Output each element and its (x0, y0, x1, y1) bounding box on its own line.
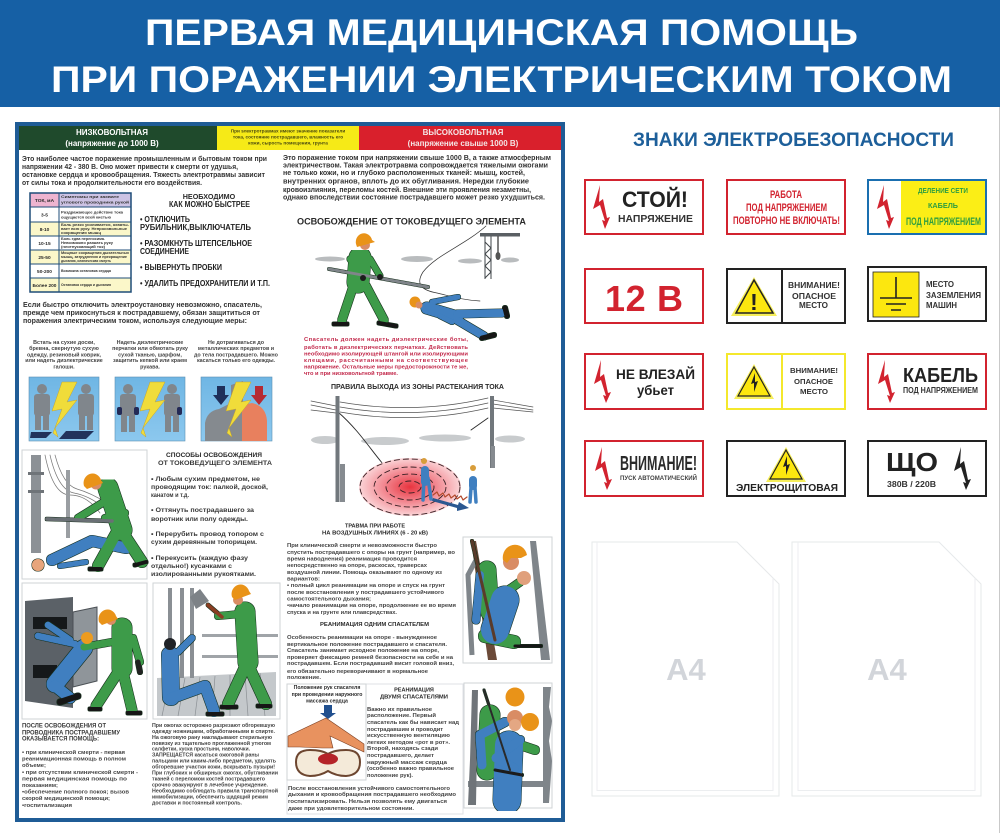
text: two rescuers: легких методом «рот в рот». (367, 740, 451, 746)
text: two rescuers: (особенно важно правильное (367, 765, 454, 772)
page right edge line (999, 107, 1000, 833)
illustration: rescuer with insulating pole (315, 226, 520, 338)
list: urgent actions: СОЕДИНЕНИЕ (140, 247, 189, 256)
text: clinical death on a pole: спуска и на грунте или плавсредствах. (287, 610, 398, 616)
text: burns (152, 722, 278, 806)
sign: stop voltage (585, 180, 703, 234)
table: current and symptoms: (неотпускающий ток) (61, 245, 105, 249)
text: after release: •обеспечение полного покоя; вызов (22, 788, 130, 796)
panel: first aid poster (17, 124, 563, 820)
table: current and symptoms: вает всю руку. Непроизвольные (61, 227, 127, 231)
text: measure 2: Надеть диэлектрические (117, 340, 183, 346)
text: after release: • при отсутствии клинической смерти - (22, 769, 138, 776)
text: after recovery: госпитализировать. Нельзя позволять ему двигаться (288, 799, 447, 805)
table: current and symptoms: Возможна остановка сердца (61, 269, 111, 273)
table: current and symptoms: сокращения мышц (61, 231, 102, 235)
sign: cable under voltage, network division: ДЕЛЕНИЕ СЕТИ (918, 186, 968, 195)
sign: yellow caution voltage (727, 354, 845, 409)
diagram: heart massage hand position: при проведении наружного (292, 692, 362, 698)
sign: yellow caution voltage: МЕСТО (800, 387, 828, 396)
text: measure 2: перчатки или обмотать руку (112, 345, 188, 352)
sign: work under voltage (727, 180, 845, 234)
header: note (217, 126, 359, 150)
icon: dielectric gloves (115, 377, 185, 441)
text: after release: • при клинической смерти - первая (22, 749, 125, 756)
sign: distribution board 380/220 V (868, 441, 986, 496)
text: one rescuer: Спасатель занимает исходное положение на опоре, (287, 648, 440, 654)
text: burns: На ожоговую рану накладывают стерильную (152, 735, 272, 741)
text: clinical death on a pole: после восстановления у пострадавшего устойчивого (287, 589, 445, 596)
list: methods of release: канатом и т.д. (151, 492, 189, 499)
diagram: heart massage hand position: массажа сердца (306, 698, 348, 704)
heading: overhead lines injury: НА ВОЗДУШНЫХ ЛИНИЯХ (6 - 20 кВ) (322, 530, 428, 536)
illustration: one rescuer on pole (463, 537, 552, 663)
text: low voltage intro: от силы тока и продолжительности его воздействия. (22, 178, 202, 187)
sign: yellow caution voltage: ВНИМАНИЕ! (790, 366, 838, 375)
text: measure 1: Встать на сухие доски, (33, 340, 95, 346)
text: high voltage intro: однако впоследствии состояние пострадавшего может резко ухудшиться. (283, 192, 545, 202)
text: measure 1 (25, 340, 103, 370)
sign: machine grounding point: МЕСТО (926, 280, 954, 289)
text: after release (22, 722, 138, 809)
heading: step voltage rules: ПРАВИЛА ВЫХОДА ИЗ ЗОНЫ РАСТЕКАНИЯ ТОКА (331, 382, 505, 391)
text: burns: иммобилизации, обеспечить щадящий режим (152, 794, 268, 800)
table: current and symptoms: 3-5 (41, 212, 48, 218)
table: current and symptoms: дыхания, клиническая смерть (61, 259, 111, 263)
text: after release: скорой медицинской помощи; (22, 795, 110, 802)
text: burns: При ожогах осторожно разрезают обгоревшую (152, 722, 275, 729)
text: low voltage intro: остановке сердца и кровообращения. Тяжесть электротравмы зависит (22, 170, 265, 179)
text: low voltage intro (22, 154, 267, 187)
list: methods of release: проводящим ток: палкой, доской, (151, 483, 268, 491)
pocket: A4 holder right: А4 (867, 652, 908, 687)
sign: machine grounding point (868, 267, 986, 321)
sign: stop voltage: СТОЙ! (622, 187, 688, 212)
text: low voltage intro: напряжении 42 - 380 В. Оно может привести к смерти от удушья, (22, 162, 238, 171)
text: after release: показаниям; (22, 783, 58, 789)
text: measure 3: до тела пострадавшего. Можно (194, 352, 279, 358)
text: burns: тканей с переломом костей пострадавшего (152, 776, 266, 782)
list: methods of release: СПОСОБЫ ОСВОБОЖДЕНИЯ (166, 452, 262, 459)
illustration: victim at electrical cabinet (22, 583, 147, 719)
header: note: кожи, сырость помещения, грунта (248, 140, 328, 146)
sign: switchboard room (727, 441, 845, 496)
text: measure 3 (194, 340, 279, 364)
text: two rescuers: наружный массаж сердца (367, 759, 448, 766)
text: two rescuers: расположение. Первый (367, 712, 436, 719)
sign: caution dangerous place: ОПАСНОЕ (792, 292, 837, 301)
table: current and symptoms: 10-15 (38, 241, 51, 247)
text: warning in red: напряжение. Остальные меры предосторожности те же, (304, 364, 468, 370)
list: methods of release: • Оттянуть пострадавшего за (151, 507, 254, 514)
sign: caution dangerous place (727, 269, 845, 323)
text: after release: реанимационная помощь в полном (22, 756, 126, 762)
text: burns: пальцами или каким-либо предметом, удалять (152, 758, 277, 764)
text: warning in red: клещами, рассчитанными на соответствующее (304, 358, 469, 364)
list: urgent actions (140, 192, 270, 288)
table: current and symptoms: 25-50 (38, 255, 51, 261)
sign: do not climb (585, 354, 703, 409)
table: current and symptoms: мышц, затруднения и прекращение (61, 255, 127, 259)
text: measure 2: рукава. (140, 364, 160, 370)
text: low voltage intro: Это наиболее частое поражение промышленным и бытовым током при (22, 154, 267, 163)
list: methods of release: • Перерубить провод топором с (151, 530, 264, 538)
sign: yellow caution voltage: ОПАСНОЕ (794, 377, 833, 386)
text: after recovery: даже при удовлетворительном состоянии. (288, 806, 415, 812)
text: high voltage intro: не только кожи, но и глубоко расположенных тканей: мышц, костей, (283, 168, 525, 177)
text: two rescuers: положение рук). (367, 773, 414, 779)
text: burns: повязку из тщательно проглаженной утюгом (152, 740, 271, 747)
pocket: A4 holder left (592, 542, 779, 796)
text: after release: ПОСЛЕ ОСВОБОЖДЕНИЯ ОТ (22, 722, 106, 730)
text: measure 1: или надеть диэлектрические (25, 358, 103, 364)
illustration: cutting wire with axe (153, 583, 280, 719)
text: after release: объеме; (22, 762, 46, 769)
title banner (0, 0, 1000, 107)
text: burns: При глубоких и обширных ожогах, обугливании (152, 770, 278, 776)
heading: overhead lines injury: ТРАВМА ПРИ РАБОТЕ (345, 524, 405, 530)
list: methods of release: сухим деревянным топорищем. (151, 539, 257, 546)
sign: machine grounding point: ЗАЗЕМЛЕНИЯ (926, 291, 981, 300)
text: measure 3: Не дотрагиваться до (208, 340, 265, 346)
illustration: two rescuers on pole (464, 683, 552, 808)
header: low voltage (19, 126, 217, 150)
sign: distribution board 380/220 V: 380В / 220В (887, 480, 936, 489)
sign: attention automatic start: ВНИМАНИЕ! (620, 453, 697, 475)
list: methods of release: воротник или полу одежды. (151, 516, 248, 523)
header: high voltage (359, 126, 561, 150)
sign: attention automatic start: ПУСК АВТОМАТИЧЕСКИЙ (620, 473, 697, 482)
text: protective measures: Если быстро отключить электроустановку невозможно, спасатель, (23, 300, 262, 309)
sign: cable under voltage (868, 354, 986, 409)
text: high voltage intro: Это поражение током при напряжении свыше 1000 В, а также атмосферным (283, 153, 551, 162)
table: current and symptoms: Мощные сокращения дыхательных (61, 251, 129, 255)
text: clinical death on a pole: воздушной линии. Помощь оказывают по одному из (287, 569, 442, 576)
text: clinical death on a pole: вариантов: (287, 576, 320, 582)
table: current and symptoms (30, 193, 131, 292)
text: after release: первая медицинская помощь по (22, 776, 128, 782)
text: one rescuer: его обязательно переворачивают в нормальное (287, 668, 428, 675)
text: after release: ПРОВОДНИКА ПОСТРАДАВШЕМУ (22, 730, 121, 736)
text: burns: одежду ножницами, обработанными в спирте. (152, 728, 275, 735)
sign: 12 V (585, 269, 703, 323)
table: current and symptoms: углового проводника рукой (61, 200, 129, 204)
diagram: heart massage hand position (287, 684, 366, 780)
list: methods of release: отдельно!) кусачками с (151, 563, 232, 570)
sign: attention automatic start (585, 441, 703, 496)
list: urgent actions: КАК МОЖНО БЫСТРЕЕ (169, 200, 250, 209)
text: clinical death on a pole: время наводнения) реанимация проводится (287, 556, 417, 562)
text: one rescuer: вертикальное положение пострадавшего и спасателя. (287, 642, 448, 648)
illustration: pulling victim with a bar (22, 450, 147, 579)
text: two rescuers: Второй, находясь сзади (367, 745, 438, 752)
table: current and symptoms: Остановка сердца и дыхания (61, 283, 111, 287)
table: current and symptoms: Боль резко усиливается, охваты- (61, 223, 129, 227)
text: burns: салфетки, куска простыни, наволочки. (152, 746, 250, 752)
text: measure 2: защитить кепкой или краем (113, 357, 187, 364)
table: current and symptoms: 8-10 (40, 227, 50, 233)
text: after recovery: После восстановления устойчивого самостоятельного (288, 785, 451, 792)
text: after release: •госпитализация (22, 803, 72, 809)
heading: two rescuers (380, 688, 448, 700)
text: warning in red (304, 336, 469, 377)
text: one rescuer: пострадавшем. Если пострадавший висит головой вниз, (287, 660, 455, 667)
text: warning in red: Спасатель должен надеть диэлектрические боты, (304, 336, 468, 343)
sign: distribution board 380/220 V: ЩО (886, 447, 938, 477)
table: current and symptoms: Невозможно разжать руку (61, 241, 113, 245)
list: urgent actions: • УДАЛИТЬ ПРЕДОХРАНИТЕЛИ И Т.П. (140, 279, 270, 288)
text: one rescuer: проверяет фиксацию ремней безопасности на себе и на (287, 654, 454, 661)
table: current and symptoms: Более 200 (33, 283, 57, 289)
text: one rescuer: положение. (287, 675, 322, 681)
text: after recovery (288, 785, 457, 812)
sign: stop voltage: НАПРЯЖЕНИЕ (618, 213, 693, 225)
text: protective measures: прежде чем прикоснуться к пострадавшему, обязан защититься от (23, 308, 260, 317)
table: current and symptoms: Боль едва переносима. (61, 237, 105, 241)
text: high voltage intro: внутренних органов, вплоть до их обугливания. Нередки глубокие (283, 176, 529, 186)
pocket: A4 holder left: А4 (666, 652, 707, 687)
illustration: step voltage zone (311, 396, 533, 516)
pocket: A4 holder right (792, 542, 981, 796)
header: note: При электротравмах имеют значение показатели (231, 128, 345, 134)
diagram: heart massage hand position: Положение рук спасателя (294, 685, 360, 691)
text: measure 1: одежду, резиновый коврик, (27, 352, 102, 358)
table: current and symptoms: ощущается всей кистью (61, 216, 111, 220)
sign: cable under voltage: КАБЕЛЬ (903, 365, 978, 387)
text: clinical death on a pole: самостоятельного дыхания; (287, 596, 371, 602)
list: methods of release: • Любым сухим предметом, не (151, 475, 260, 483)
text: clinical death on a pole: При клинической смерти и невозможности быстро (287, 542, 438, 549)
list: urgent actions: НЕОБХОДИМО (183, 192, 236, 201)
text: one rescuer (287, 634, 455, 681)
header: low voltage: (напряжение до 1000 В) (65, 139, 159, 148)
text: burns: ЗАПРЕЩАЕТСЯ касаться ожоговой раны (152, 752, 259, 758)
sign: caution dangerous place: ! (750, 289, 758, 315)
list: urgent actions: • ВЫВЕРНУТЬ ПРОБКИ (140, 263, 222, 272)
sign: machine grounding point: МАШИН (926, 301, 957, 310)
text: after release: ОКАЗЫВАЕТСЯ ПОМОЩЬ: (22, 736, 99, 742)
panel: two rescuers (287, 684, 463, 814)
text: high voltage intro (283, 153, 551, 202)
heading: overhead lines injury (322, 524, 428, 536)
text: clinical death on a pole (287, 542, 456, 616)
sign: cable under voltage, network division (868, 180, 986, 234)
heading: release from live element: ОСВОБОЖДЕНИЕ ОТ ТОКОВЕДУЩЕГО ЭЛЕМЕНТА (297, 216, 526, 228)
text: protective measures (23, 300, 262, 325)
text: burns: срочно эвакуируют в лечебное учреждение. (152, 782, 268, 788)
list: urgent actions: • РАЗОМКНУТЬ ШТЕПСЕЛЬНОЕ (140, 239, 252, 248)
sign: do not climb: НЕ ВЛЕЗАЙ (616, 365, 695, 382)
text: clinical death on a pole: непосредственно на опоре, раскосах, траверсах (287, 563, 427, 569)
text: burns: Необходимо соблюдать правила транспортной (152, 788, 278, 794)
text: two rescuers: пострадавшим и проводит (367, 727, 443, 733)
text: two rescuers: спасатель как бы нависает над (367, 719, 460, 726)
list: urgent actions: РУБИЛЬНИК,ВЫКЛЮЧАТЕЛЬ (140, 223, 251, 232)
sign: cable under voltage, network division: КАБЕЛЬ (928, 201, 959, 210)
list: methods of release: • Перекусить (каждую фазу (151, 555, 248, 562)
list: methods of release (151, 452, 272, 578)
table: current and symptoms: Раздражающее действие тока (61, 210, 123, 214)
text: warning in red: что и при низковольтной травме. (304, 370, 398, 377)
title banner: ПРИ ПОРАЖЕНИИ ЭЛЕКТРИЧЕСКИМ ТОКОМ (51, 58, 952, 100)
heading: two rescuers: РЕАНИМАЦИЯ (394, 688, 434, 694)
sign: 12 V: 12 В (605, 278, 683, 319)
text: two rescuers: Важно их правильное (367, 707, 432, 713)
text: one rescuer: Особенность реанимации на опоре - вынужденное (287, 634, 437, 641)
text: measure 3: касаться только его одежды. (197, 358, 276, 364)
sign: work under voltage: ПОД НАПРЯЖЕНИЕМ (746, 202, 827, 214)
text: measure 2: сухой тканью, шарфом, (118, 352, 182, 358)
header: low voltage: НИЗКОВОЛЬТНАЯ (76, 128, 148, 137)
text: two rescuers (367, 707, 460, 779)
sign: work under voltage: ПОВТОРНО НЕ ВКЛЮЧАТЬ! (733, 215, 840, 227)
table: current and symptoms: 50-200 (37, 269, 52, 275)
text: measure 1: галоши. (53, 364, 75, 370)
icon: dielectric mats (29, 377, 99, 441)
sign: do not climb: убьет (637, 382, 674, 398)
heading: electrical safety signs: ЗНАКИ ЭЛЕКТРОБЕЗОПАСНОСТИ (633, 130, 954, 151)
text: warning in red: необходимо изолирующей штангой или изолирующими (304, 350, 468, 358)
list: methods of release: изолированными рукоятками. (151, 571, 256, 578)
text: clinical death on a pole: • полный цикл реанимации на опоре и спуск на грунт (287, 582, 445, 589)
table: current and symptoms: ТОК, мА (35, 198, 55, 204)
sign: work under voltage: РАБОТА (770, 189, 802, 201)
heading: two rescuers: ДВУМЯ СПАСАТЕЛЯМИ (380, 694, 448, 700)
header: high voltage: ВЫСОКОВОЛЬТНАЯ (423, 128, 504, 137)
text: two rescuers: пострадавшего, делает (367, 753, 434, 759)
sign: cable under voltage: ПОД НАПРЯЖЕНИЕМ (903, 386, 978, 395)
text: two rescuers: искусственную вентиляцию (367, 733, 450, 739)
text: burns: обгоревшие участки кожи, вскрывать пузыри! (152, 764, 275, 770)
icon: touching clothes only (201, 377, 272, 441)
sign: caution dangerous place: ВНИМАНИЕ! (788, 281, 840, 290)
header: high voltage: (напряжение свыше 1000 В) (408, 139, 519, 148)
text: after recovery: дыхания и кровообращения пострадавшего необходимо (288, 791, 457, 798)
text: clinical death on a pole: спустить пострадавшего с опоры на грунт (например, во (287, 550, 456, 556)
text: clinical death on a pole: •начало реанимации на опоре, продолжение ее во время (287, 603, 456, 609)
text: protective measures: поражения электрическим током, используя следующие меры: (23, 316, 247, 325)
header: note: тока, состояние пострадавшего, влажность его (233, 134, 343, 140)
text: high voltage intro: электричеством. Такая электротравма сопровождается тяжелыми ожогами (283, 160, 548, 170)
text: measure 3: металлических предметов и (198, 346, 274, 352)
sign: switchboard room: ЭЛЕКТРОЩИТОВАЯ (736, 482, 838, 494)
sign: caution dangerous place: МЕСТО (799, 301, 828, 310)
table: current and symptoms: Симптомы при захвате (61, 195, 119, 199)
title banner: ПЕРВАЯ МЕДИЦИНСКАЯ ПОМОЩЬ (145, 11, 858, 53)
text: warning in red: работать в диэлектрических перчатках. Действовать (304, 344, 468, 351)
text: measure 2 (112, 340, 188, 370)
text: high voltage intro: кровоизлияния, переломы костей. Внешние эти проявления незаметны, (283, 185, 531, 194)
text: measure 1: бревна, свернутую сухую (29, 345, 99, 352)
heading: one rescuer: РЕАНИМАЦИЯ ОДНИМ СПАСАТЕЛЕМ (320, 622, 429, 628)
text: burns: доставки и постоянный контроль. (152, 800, 242, 806)
list: urgent actions: • ОТКЛЮЧИТЬ (140, 215, 190, 224)
list: methods of release: ОТ ТОКОВЕДУЩЕГО ЭЛЕМЕНТА (158, 460, 272, 467)
